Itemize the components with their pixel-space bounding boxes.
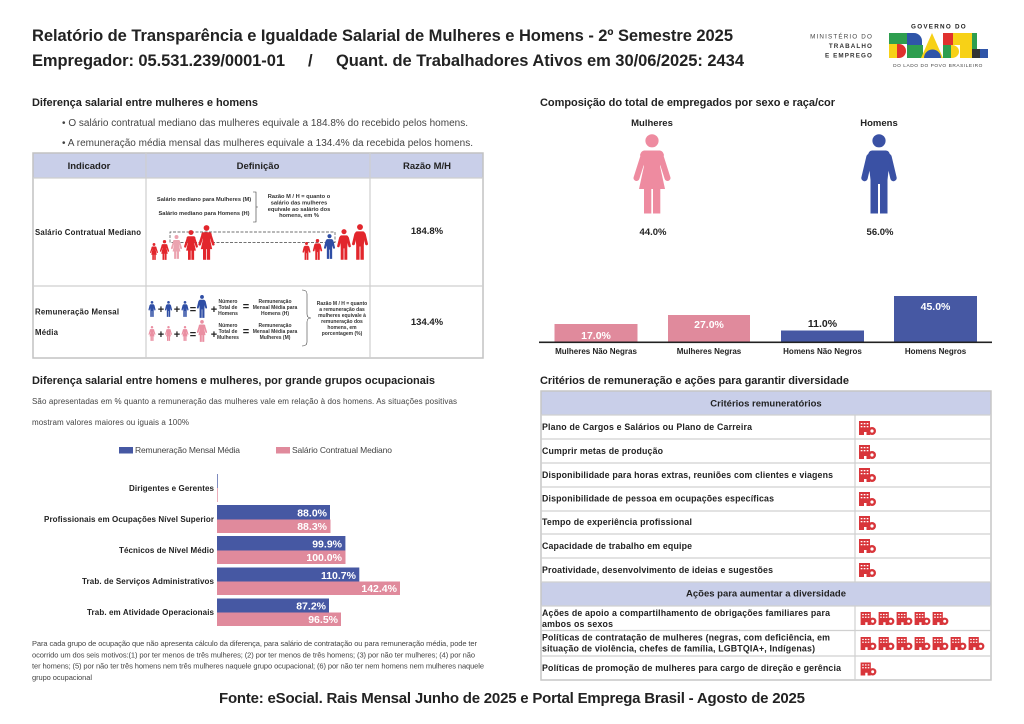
icon: mulheres 44.0%	[631, 118, 673, 238]
legend	[119, 445, 392, 455]
group: técnicos: 99.9%	[312, 538, 343, 550]
logo: Governo do Brasil	[889, 24, 988, 69]
diagram: remuneração média: +	[158, 329, 164, 341]
criterion: ocupações específicas	[542, 492, 876, 506]
text block: nota de rodapé: Para cada grupo de ocupação que não apresenta cálculo da diferença, para salário de contratação ou para remuneração média, pode ter	[32, 639, 478, 648]
legend: Remuneração Mensal Média	[135, 445, 240, 455]
text block: bullet points	[62, 118, 473, 149]
diagram: remuneração média: Mensal Média para	[253, 329, 297, 335]
row value: 184.8%: 184.8%	[411, 226, 444, 237]
diagram: remuneração média: Homens (H)	[261, 311, 289, 317]
diagram: salário mediano: Salário mediano para Mulheres (M)	[157, 197, 251, 203]
diagram: salário mediano: Razão M / H = quanto o	[268, 194, 331, 200]
group: profissionais	[44, 505, 330, 533]
title: Relatório de Transparência e Igualdade Salarial de Mulheres e Homens - 2º Semestre 2025	[32, 27, 733, 45]
panel: tabela de indicadores	[33, 153, 483, 358]
action: promoção de mulheres: Políticas de promoção de mulheres para cargo de direção e gerência	[542, 663, 841, 673]
diagram: remuneração média: +	[174, 304, 180, 316]
diagram: remuneração média: +	[158, 304, 164, 316]
bar: mulheres não negras: Mulheres Não Negras	[555, 347, 637, 356]
diagram: remuneração média: =	[243, 301, 249, 313]
text block: nota de rodapé: ter homens; (5) por não ter três homens nem três mulheres naquele grupo ocupacional; (6) por não ter nem homens nem mulheres naquele	[32, 662, 484, 670]
diagram: salário mediano: homens, em %	[279, 213, 319, 219]
text block: bullet points: • O salário contratual mediano das mulheres equivale a 184.8% do recebido pelos homens.	[62, 118, 468, 129]
text block: introdução	[32, 397, 457, 427]
diagram: remuneração média: Homens	[218, 311, 238, 317]
criterion: horas extras: Disponibilidade para horas extras, reuniões com clientes e viagens	[542, 470, 833, 480]
diagram: remuneração média: a remuneração das	[319, 307, 365, 313]
title: /	[308, 52, 313, 70]
diagram: remuneração média: Mensal Média para	[253, 305, 297, 311]
bar chart: raça/cor	[539, 296, 992, 356]
table header	[68, 161, 451, 172]
group: profissionais: 88.3%	[297, 521, 328, 533]
diagram: remuneração média: =	[190, 304, 196, 316]
group: técnicos	[119, 536, 346, 564]
diagram: remuneração média: mulheres equivale à	[318, 313, 366, 319]
group: atividade operacional	[87, 598, 341, 626]
group: serviços administrativos: Trab. de Serviços Administrativos	[82, 577, 215, 586]
bar: mulheres negras	[668, 315, 750, 356]
logo: Ministério do Trabalho e Emprego	[810, 32, 873, 60]
diagram: remuneração média: Mulheres (M)	[260, 335, 291, 341]
action: promoção de mulheres	[542, 662, 876, 676]
diagram: remuneração média: =	[190, 329, 196, 341]
group: serviços administrativos	[82, 568, 400, 595]
legend: Salário Contratual Mediano	[292, 445, 392, 455]
text block: introdução: São apresentadas em % quanto a remuneração das mulheres vale em relação à dos homens. As situações positivas	[32, 397, 457, 406]
row label: remuneração mensal média: Remuneração Mensal	[35, 308, 119, 316]
logo: Ministério do Trabalho e Emprego: MINISTÉRIO DO	[810, 32, 873, 40]
bar: homens negros	[894, 296, 977, 356]
bar: mulheres não negras	[554, 324, 638, 356]
heading: grupos ocupacionais: Diferença salarial entre homens e mulheres, por grande grupos ocupacionais	[32, 375, 435, 387]
group: profissionais: 88.0%	[297, 508, 328, 520]
table heading: critérios remuneratórios: Critérios remuneratórios	[710, 398, 822, 410]
table header: Definição	[237, 161, 280, 172]
diagram: salário mediano	[151, 192, 367, 260]
criterion: metas de produção: Cumprir metas de produção	[542, 446, 664, 456]
text block: nota de rodapé	[32, 639, 484, 682]
diagram: remuneração média: porcentagem (%)	[322, 331, 363, 337]
group: atividade operacional: 96.5%	[308, 614, 339, 626]
diagram: remuneração média: Número	[219, 323, 237, 329]
logo: Ministério do Trabalho e Emprego: E EMPREGO	[825, 52, 873, 60]
action: contratação de mulheres: situação de violência, chefes de família, LGBTQIA+, Indígenas)	[542, 644, 815, 654]
title: Quant. de Trabalhadores Ativos em 30/06/2025: 2434	[336, 52, 745, 70]
action: compartilhamento de obrigações: ambos os sexos	[542, 619, 613, 629]
group: atividade operacional: 87.2%	[296, 600, 327, 612]
group: serviços administrativos: 110.7%	[321, 570, 357, 582]
diagram: remuneração média: homens, em	[327, 325, 357, 331]
row label: salário contratual mediano: Salário Contratual Mediano	[35, 228, 141, 237]
table header: Indicador	[68, 161, 111, 172]
bar: homens não negros: Homens Não Negros	[783, 347, 862, 356]
diagram: remuneração média	[149, 290, 367, 346]
text block: bullet points: • A remuneração média mensal das mulheres equivale a 134.4% da recebida pelos homens.	[62, 138, 473, 149]
row value: 134.4%: 134.4%	[411, 317, 444, 328]
diagram: remuneração média: Razão M / H = quanto	[317, 301, 367, 307]
action: contratação de mulheres	[542, 632, 984, 654]
bar chart: grupos ocupacionais	[44, 474, 400, 626]
diagram: salário mediano: salário das mulheres	[271, 200, 327, 206]
group: técnicos: Técnicos de Nível Médio	[119, 546, 214, 555]
title: Empregador: 05.531.239/0001-01	[32, 52, 285, 70]
diagram: remuneração média: Remuneração	[258, 323, 292, 329]
action: compartilhamento de obrigações: Ações de apoio a compartilhamento de obrigações familiares para	[542, 608, 830, 618]
bar: homens negros: 45.0%	[921, 301, 951, 313]
bar: mulheres negras: Mulheres Negras	[677, 347, 742, 356]
icon: homens 56.0%	[860, 118, 898, 238]
group: atividade operacional: Trab. em Atividade Operacionais	[87, 608, 215, 617]
icon: homens 56.0%: 56.0%	[867, 227, 894, 238]
diagram: remuneração média: +	[174, 329, 180, 341]
diagram: remuneração média: Mulheres	[217, 335, 239, 341]
panel: critérios de remuneração	[541, 391, 991, 680]
table heading: ações: Ações para aumentar a diversidade	[686, 588, 846, 600]
diagram: remuneração média: Número	[219, 299, 237, 305]
icon: mulheres 44.0%: 44.0%	[640, 227, 667, 238]
title	[32, 27, 745, 70]
diagram: remuneração média: =	[243, 326, 249, 338]
heading: critérios: Critérios de remuneração e ações para garantir diversidade	[540, 375, 849, 387]
diagram: remuneração média: Remuneração	[258, 299, 292, 305]
criterion: proatividade	[542, 563, 876, 577]
logo: Governo do Brasil: GOVERNO DO	[911, 24, 967, 30]
criterion: ocupações específicas: Disponibilidade de pessoa em ocupações específicas	[542, 494, 774, 504]
bar: mulheres negras: 27.0%	[694, 319, 725, 331]
text block: nota de rodapé: grupo ocupacional	[32, 673, 92, 682]
text block: nota de rodapé: ocorrido um dos seis motivos:(1) por ter menos de três mulheres; (2) por ter menos de três homens; (3) por não ter mulheres; (4) por não	[32, 650, 475, 660]
criterion: trabalho em equipe: Capacidade de trabalho em equipe	[542, 541, 692, 551]
bar: mulheres não negras: 17.0%	[581, 330, 612, 342]
criterion: horas extras	[542, 468, 876, 482]
logo: Governo do Brasil: DO LADO DO POVO BRASILEIRO	[893, 63, 983, 69]
action: contratação de mulheres: Políticas de contratação de mulheres (negras, com deficiência, em	[542, 632, 830, 642]
heading: composição: Composição do total de empregados por sexo e raça/cor	[540, 97, 836, 109]
action: compartilhamento de obrigações	[542, 608, 948, 629]
criterion: trabalho em equipe	[542, 539, 876, 553]
criterion: metas de produção	[542, 445, 876, 459]
diagram: remuneração média: +	[211, 304, 217, 316]
diagram: remuneração média: Total de	[219, 329, 238, 335]
diagram: remuneração média: Total de	[219, 305, 238, 311]
diagram: salário mediano: equivale ao salário dos	[268, 207, 330, 213]
diagram: remuneração média: remuneração dos	[321, 319, 363, 325]
text block: introdução: mostram valores maiores ou iguais a 100%	[32, 418, 189, 427]
group: serviços administrativos: 142.4%	[361, 583, 398, 595]
diagram: remuneração média: +	[211, 329, 217, 341]
criterion: plano de cargos	[542, 421, 876, 435]
table header: Razão M/H	[403, 161, 451, 172]
logo: Ministério do Trabalho e Emprego: TRABALHO	[829, 43, 873, 50]
group: dirigentes e gerentes: Dirigentes e Gerentes	[129, 484, 215, 493]
group: técnicos: 100.0%	[306, 552, 343, 564]
icon: homens 56.0%: Homens	[860, 118, 898, 129]
bar: homens não negros: 11.0%	[808, 318, 838, 330]
row label: remuneração mensal média	[35, 308, 119, 337]
row label: remuneração mensal média: Média	[35, 328, 59, 337]
bar: homens negros: Homens Negros	[905, 347, 967, 356]
criterion: tempo de experiência	[542, 516, 876, 530]
source: Fonte: eSocial. Rais Mensal Junho de 2025 e Portal Emprega Brasil - Agosto de 2025	[219, 690, 805, 707]
criterion: tempo de experiência: Tempo de experiência profissional	[542, 517, 692, 527]
heading: diferença salarial: Diferença salarial entre mulheres e homens	[32, 97, 258, 109]
diagram: salário mediano: Salário mediano para Homens (H)	[158, 211, 250, 217]
bar: homens não negros	[781, 318, 864, 356]
criterion: proatividade: Proatividade, desenvolvimento de ideias e sugestões	[542, 565, 773, 575]
group: profissionais: Profissionais em Ocupações Nível Superior	[44, 515, 214, 524]
group: dirigentes e gerentes	[129, 474, 218, 502]
criterion: plano de cargos: Plano de Cargos e Salários ou Plano de Carreira	[542, 422, 752, 432]
icon: mulheres 44.0%: Mulheres	[631, 118, 673, 129]
